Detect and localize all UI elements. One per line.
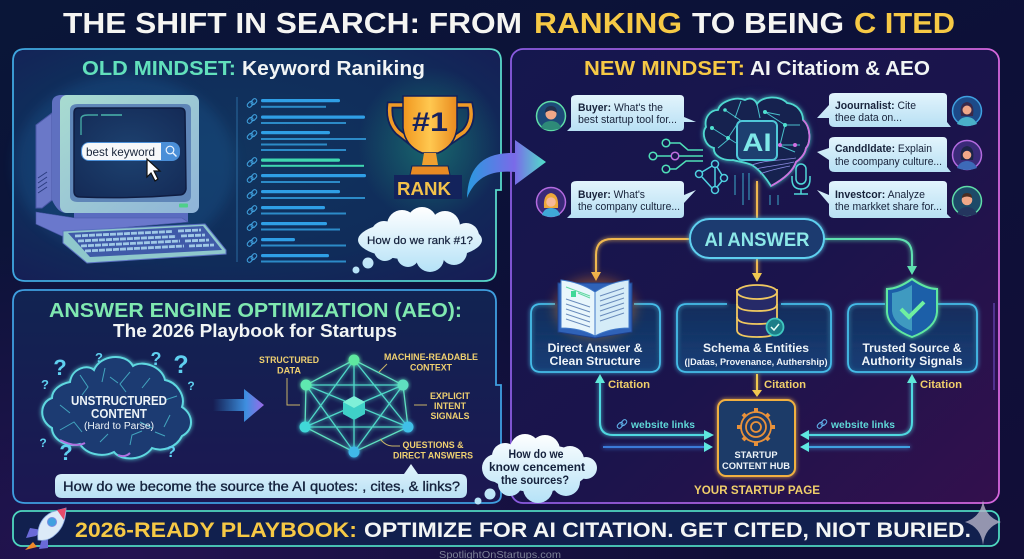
question marks: ? (187, 379, 195, 393)
speech bubble: investor: the markket share for... (835, 201, 942, 213)
question marks (39, 349, 195, 465)
card: direct answer: Direct Answer & (548, 341, 643, 355)
network labels: QUESTIONS & (402, 440, 464, 451)
your startup page label: YOUR STARTUP PAGE (694, 483, 820, 497)
question marks: ? (95, 350, 103, 365)
network labels: DATA (277, 366, 301, 376)
arrow: to structured (213, 389, 264, 422)
icon: AI brain (704, 97, 809, 186)
card: trusted source (848, 279, 977, 372)
network labels (259, 352, 478, 462)
connector lines from AI answer (596, 181, 912, 274)
startup content hub: STARTUP (734, 450, 778, 460)
panel: new mindset (511, 49, 999, 503)
thought cloud: sources (474, 434, 597, 504)
heading: new mindset: AI Citatiom & AEO (750, 58, 930, 80)
rank plate: RANK (397, 179, 451, 199)
startup content hub (718, 400, 795, 476)
question marks: ? (166, 444, 176, 461)
speech bubble: investor (817, 181, 951, 218)
banner text: OPTIMIZE FOR AI CITATION. GET CITED, NIOT BURIED. (364, 518, 971, 542)
thought cloud: sources: know cencement (489, 462, 585, 474)
icon: retro computer (36, 95, 226, 263)
network labels: EXPLICIT (430, 391, 470, 402)
icon: trophy: #1 (412, 107, 448, 137)
avatar: buyer man (536, 102, 566, 130)
AI answer pill (690, 219, 824, 258)
question bubble: AEO: How do we become the source the AI quotes: , cites, & links? (63, 478, 460, 494)
icon: knowledge network (300, 354, 414, 458)
subheading: AEO: The 2026 Playbook for Startups (113, 321, 397, 341)
speech bubble: candidate (817, 137, 951, 172)
icon: sparkle (965, 500, 1001, 545)
icon: unstructured cloud: (Hard to Parse) (84, 421, 154, 432)
icon: open book (558, 280, 632, 338)
card: direct answer: Clean Structure (550, 354, 641, 368)
heading: new mindset: NEW MINDSET: (584, 58, 745, 80)
question bubble: AEO (55, 464, 467, 498)
search box (81, 142, 180, 161)
citation labels: Citation (764, 379, 806, 391)
rank plate (394, 175, 462, 199)
thought cloud: sources: How do we (508, 449, 564, 461)
website links labels: website links (630, 419, 695, 431)
banner: bottom playbook (13, 500, 1001, 550)
speech bubble: investor: Investcor: Analyze (835, 189, 925, 201)
icon: shield (887, 279, 937, 337)
panel: old mindset (13, 49, 502, 281)
icon: database (737, 285, 784, 337)
icon: microphone (792, 164, 810, 194)
arrowheads from AI answer (591, 266, 917, 282)
icon: AI brain: AI (742, 129, 772, 157)
icon: trophy (390, 96, 471, 175)
speech bubble: buyer tool (567, 95, 696, 131)
hub connector arrows (595, 374, 917, 452)
question marks: ? (53, 355, 67, 380)
icon: cursor (147, 159, 160, 181)
icon: gear (737, 408, 775, 446)
arrow: old to new mindset (467, 140, 546, 198)
title (63, 8, 955, 40)
question marks: ? (59, 440, 73, 465)
network labels: INTENT (434, 401, 466, 412)
speech bubble: buyer tool: best startup tool for... (578, 114, 677, 126)
circuit traces (649, 139, 778, 205)
leader lines (287, 364, 427, 446)
citation labels (608, 379, 962, 391)
speech bubble: journalist: Joournalist: Cite (835, 100, 916, 112)
card: schema (677, 285, 831, 372)
question marks: ? (39, 436, 47, 450)
icon: unstructured cloud: CONTENT (91, 407, 147, 421)
avatar: journalist (952, 96, 982, 126)
card: schema: (|Datas, Provenance, Authership) (684, 357, 828, 368)
card: schema: Schema & Entities (703, 341, 809, 355)
heading: new mindset (584, 58, 930, 80)
citation labels: Citation (920, 379, 962, 391)
heading: old mindset: Keyword Raniking (242, 58, 425, 80)
AI answer pill: AI ANSWER (704, 230, 810, 251)
speech bubble: buyer tool: Buyer: What's the (578, 102, 663, 114)
question marks: ? (41, 377, 49, 392)
network labels: CONTEXT (410, 362, 452, 374)
heading: old mindset (82, 58, 425, 80)
avatar: candidate (952, 140, 982, 170)
heading: AEO: ANSWER ENGINE OPTIMIZATION (AEO): (49, 300, 462, 322)
speech bubble: journalist: thee data on... (835, 112, 902, 124)
thought cloud: sources: the sources? (501, 475, 569, 487)
banner text: 2026-READY PLAYBOOK: (75, 518, 357, 542)
website links labels: website links (830, 419, 895, 431)
speech bubble: candidate: the coompany culture... (835, 156, 942, 168)
card: trusted source: Authority Signals (862, 354, 963, 368)
citation labels: Citation (608, 379, 650, 391)
speech bubble: buyer culture (567, 181, 696, 218)
network labels: DIRECT ANSWERS (393, 450, 473, 462)
title: C ITED (854, 8, 955, 40)
thought cloud: rank (352, 207, 482, 274)
avatar: buyer woman (536, 188, 566, 217)
question marks: ? (150, 349, 162, 369)
card: direct answer (531, 278, 660, 372)
speech bubble: journalist (817, 93, 951, 127)
icon: unstructured cloud (42, 357, 191, 458)
heading: old mindset: OLD MINDSET: (82, 58, 236, 80)
title: RANKING (534, 8, 682, 40)
network labels: SIGNALS (430, 411, 470, 422)
icon: rocket (25, 508, 66, 550)
speech bubble: candidate: Canddldate: Explain (835, 143, 932, 155)
question marks: ? (173, 351, 189, 379)
thought cloud: rank: How do we rank #1? (367, 235, 473, 247)
search box: best keyword (86, 145, 155, 159)
title: THE SHIFT IN SEARCH: FROM (63, 8, 522, 40)
startup content hub: CONTENT HUB (722, 461, 791, 471)
network labels: MACHINE-READABLE (384, 352, 478, 363)
icon: unstructured cloud: UNSTRUCTURED (71, 394, 167, 408)
banner text (75, 518, 971, 542)
panel: AEO (13, 290, 501, 503)
avatar: investor (952, 186, 982, 216)
title: TO BEING (692, 8, 844, 40)
speech bubble: buyer culture: Buyer: What's (578, 189, 645, 201)
website links labels (616, 419, 895, 431)
speech bubble: buyer culture: the company culture... (578, 201, 680, 213)
card: trusted source: Trusted Source & (862, 341, 962, 355)
search results list (237, 97, 366, 263)
network labels: STRUCTURED (259, 355, 319, 366)
